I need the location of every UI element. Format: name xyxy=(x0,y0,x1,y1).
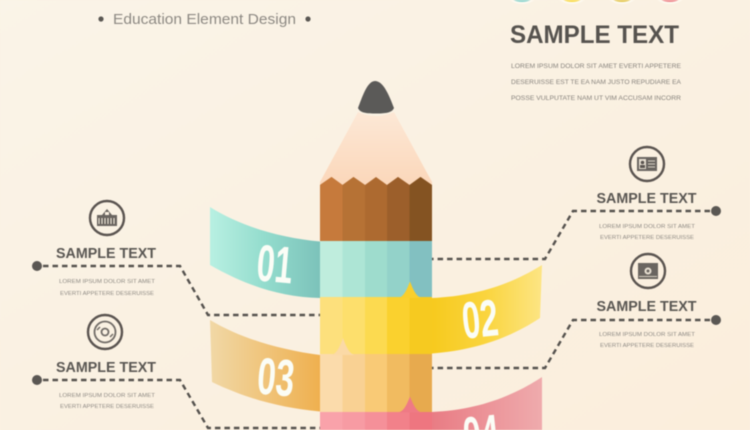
icon: school xyxy=(90,201,124,235)
main text block: POSSE VULPUTATE NAM UT VIM ACCUSAM INCORR xyxy=(511,96,682,102)
main text block: SAMPLE TEXT xyxy=(510,21,679,49)
panel: right item 1: EVERTI APPETERE DESERUISSE xyxy=(600,235,694,241)
pencil band: orange xyxy=(320,338,432,412)
ribbon 03 xyxy=(210,320,320,412)
ribbon 02: 02 xyxy=(459,289,501,351)
panel: left item 1: SAMPLE TEXT xyxy=(56,246,156,262)
icon: disc xyxy=(88,315,122,349)
panel: right item 1: LOREM IPSUM DOLOR SIT AMET xyxy=(599,224,696,230)
panel: left item 2 xyxy=(56,315,156,410)
pencil tip: graphite xyxy=(358,81,394,114)
panel: right item 2: EVERTI APPETERE DESERUISSE xyxy=(600,343,694,349)
panel: left item 1 xyxy=(56,201,156,297)
pencil band: pink xyxy=(320,396,432,430)
panel: right item 2: SAMPLE TEXT xyxy=(596,299,697,315)
panel: left item 2: SAMPLE TEXT xyxy=(56,360,156,376)
panel: right item 2 xyxy=(596,254,697,349)
panel: left item 2: EVERTI APPETERE DESERUISSE xyxy=(60,404,154,410)
panel: right item 1: SAMPLE TEXT xyxy=(596,191,697,207)
pencil xyxy=(320,81,432,430)
connector: 02 xyxy=(432,211,710,259)
pencil band: yellow xyxy=(320,282,432,355)
icon: photo screen xyxy=(631,254,665,288)
main text block: DESERUISSE EST TE EA NAM JUSTO REPUDIARE EA xyxy=(511,80,681,86)
ribbon 01: 01 xyxy=(254,235,295,295)
ribbon 01 xyxy=(210,207,320,298)
connector: 03 xyxy=(43,380,320,428)
panel: left item 1: LOREM IPSUM DOLOR SIT AMET xyxy=(59,279,156,285)
connector: 04 xyxy=(432,320,710,368)
pencil barrel: brown xyxy=(320,177,432,241)
panel: right item 2: LOREM IPSUM DOLOR SIT AMET xyxy=(599,332,696,338)
main text block: LOREM IPSUM DOLOR SIT AMET EVERTI APPETERE xyxy=(511,64,681,70)
heading: education element design: Education Element Design xyxy=(113,12,296,28)
ribbon 03: 03 xyxy=(255,347,297,408)
connector: 01 xyxy=(43,266,320,315)
panel: left item 1: EVERTI APPETERE DESERUISSE xyxy=(60,291,154,297)
top colour dots xyxy=(502,0,690,3)
pencil band: teal xyxy=(320,241,432,298)
panel: right item 1 xyxy=(596,147,697,241)
icon: id card xyxy=(630,147,664,181)
ribbon 02 xyxy=(432,265,542,354)
ribbon 04 xyxy=(432,377,542,430)
pencil tip: wood cone xyxy=(320,112,432,190)
connector dots xyxy=(32,206,721,385)
panel: left item 2: LOREM IPSUM DOLOR SIT AMET xyxy=(59,393,156,399)
main text block xyxy=(510,21,682,102)
